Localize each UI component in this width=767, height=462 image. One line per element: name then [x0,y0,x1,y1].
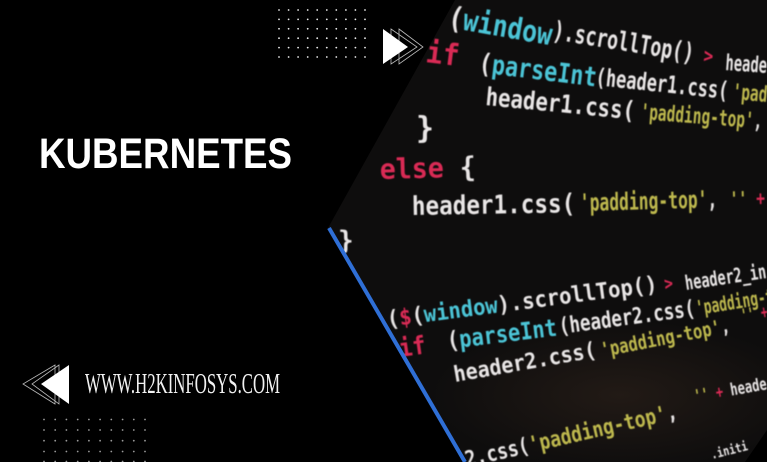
title: KUBERNETES [39,130,292,178]
website url: WWW.H2KINFOSYS.COM [85,369,280,400]
photo panel: code on screen: (header2.css( [557,295,697,340]
photo panel: code on screen: 'padding-top', [640,100,763,134]
dot grid: top [278,9,366,58]
dot grid: bottom [43,419,146,462]
photo panel: code on screen: (parseInt [445,314,558,355]
photo panel: code on screen: if [424,34,461,73]
photo panel: code on screen [320,0,767,462]
photo panel: code on screen: if [397,330,428,363]
photo panel: code on screen: ).scrollTop() [551,16,696,69]
photo panel: code on screen: > [663,272,674,294]
photo panel: code on screen: header1.css( [484,83,636,126]
photo panel: code on screen: (window [446,0,555,53]
photo panel: code on screen: header2.css( [451,336,598,387]
photo panel: code on screen: else { [379,152,476,186]
icon: top arrows [383,29,423,64]
photo panel: code on screen: 'padding-top', [599,314,732,362]
photo panel: code on screen: (header1.css( [594,63,730,105]
icon: bottom arrows [23,365,69,404]
photo panel: code on screen: } [338,226,354,256]
photo panel: code on screen: } [416,111,434,146]
photo panel: code on screen: header1.css( [412,188,575,221]
blue edge line [329,228,465,462]
photo panel: code on screen: header2_in [683,261,767,296]
photo panel: code on screen: 'padding-top', [579,185,718,217]
photo panel: code on screen: (parseInt [477,47,599,93]
photo panel: code on screen: '' + [729,188,765,212]
photo panel: code on screen: .initi [709,438,749,462]
photo panel: code on screen: > [702,44,715,69]
photo panel: code on screen: ($(window).scrollTop() [385,272,659,333]
